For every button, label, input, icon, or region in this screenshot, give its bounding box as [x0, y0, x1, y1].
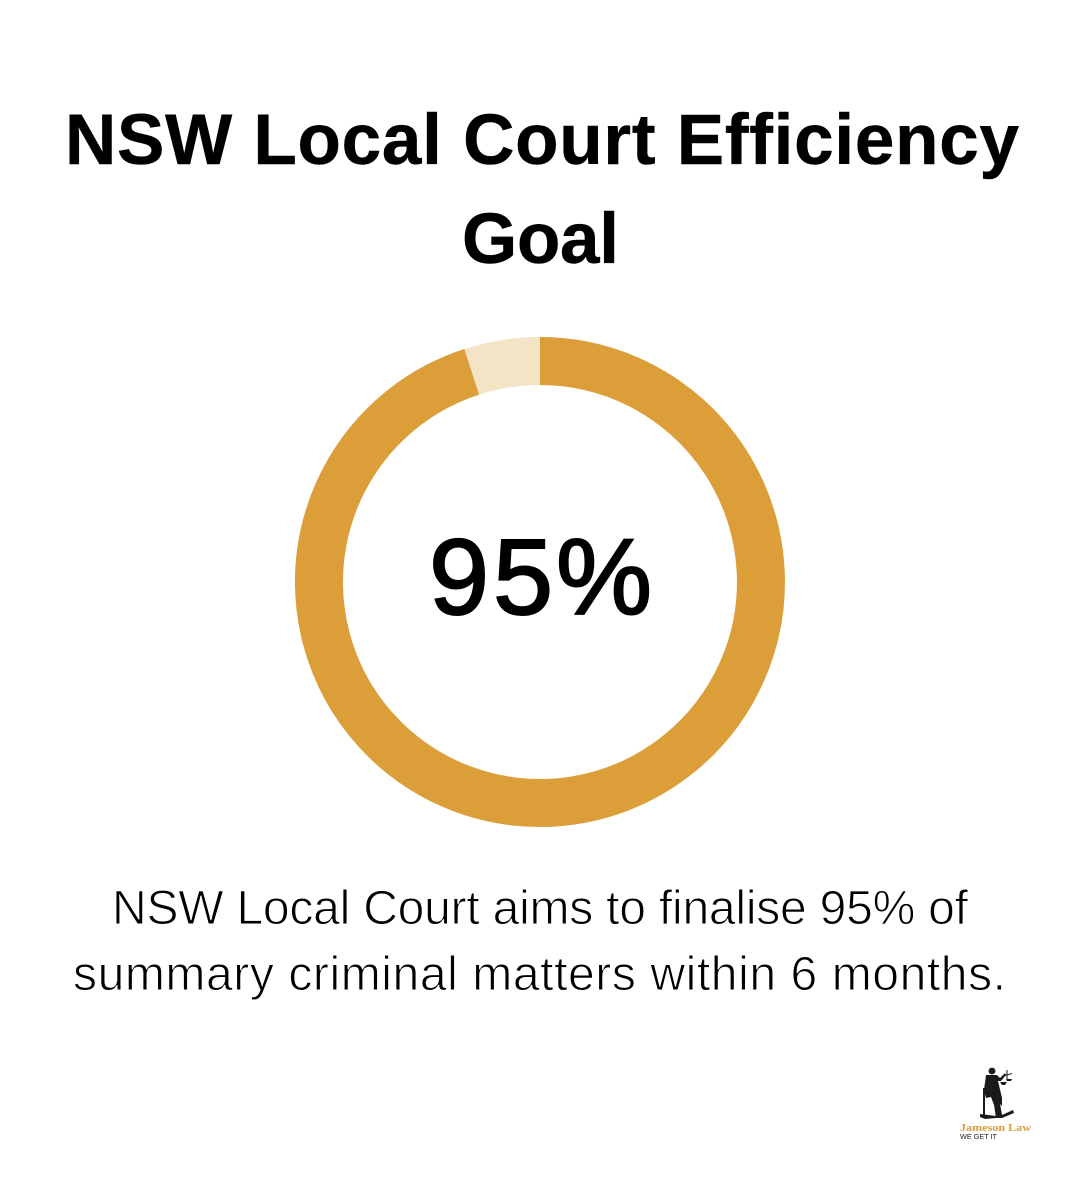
- logo: Jameson Law: [960, 1068, 1031, 1141]
- description text: NSW Local Court aims to finalise 95% of: [112, 882, 969, 935]
- donut chart: 95%: [319, 361, 761, 803]
- title: [65, 101, 1020, 279]
- title: NSW Local Court Efficiency: [65, 101, 1020, 180]
- center value: 95%: [429, 516, 652, 637]
- icon: lady justice: [980, 1068, 1014, 1119]
- filled segment: [319, 361, 761, 803]
- description text: [73, 882, 1006, 1001]
- description text: summary criminal matters within 6 months.: [73, 948, 1006, 1001]
- logo tagline: WE GET IT: [960, 1134, 998, 1141]
- title: Goal: [462, 200, 619, 279]
- logo name: Jameson Law: [960, 1122, 1031, 1134]
- remaining segment: [472, 361, 540, 372]
